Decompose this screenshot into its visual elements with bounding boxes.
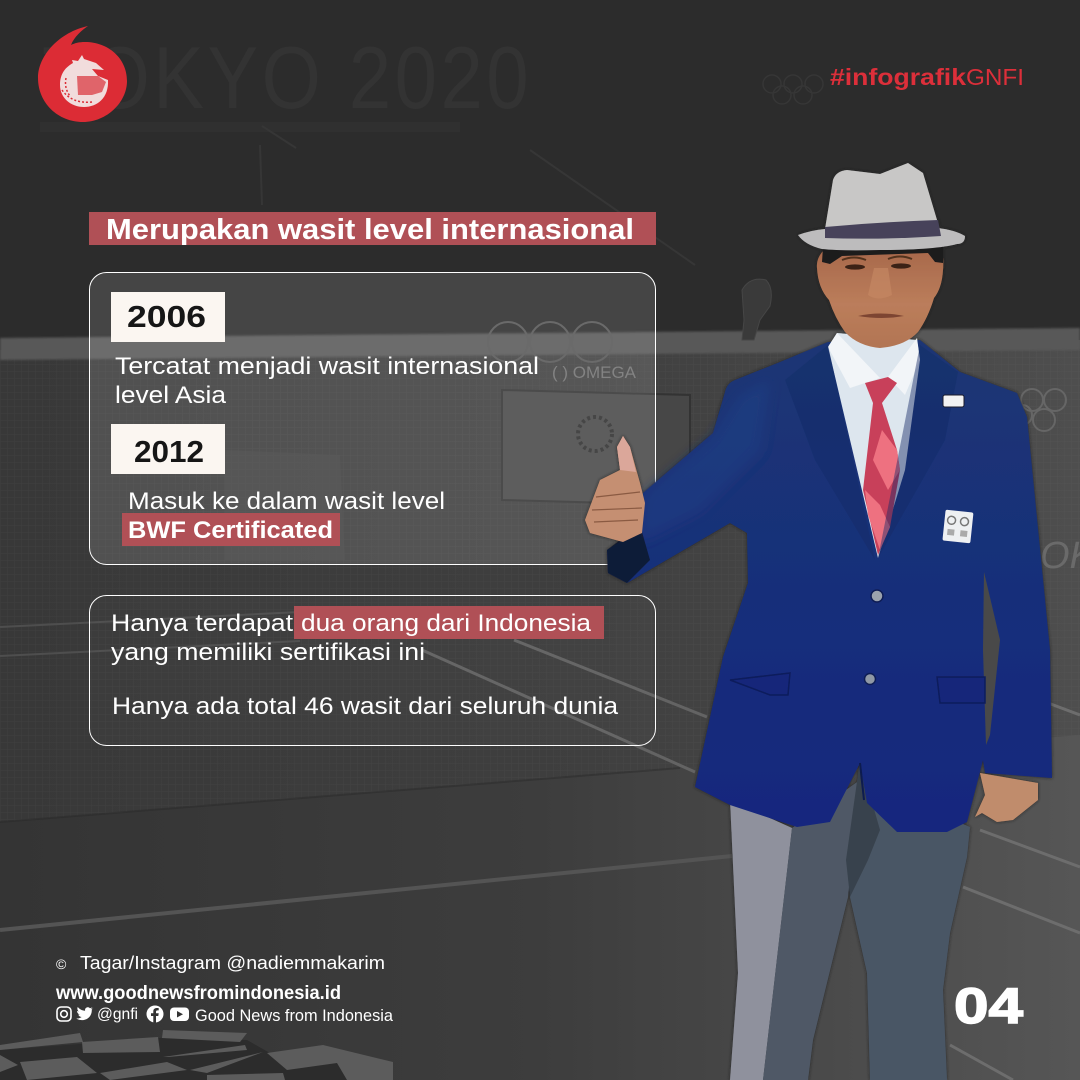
ghost rings top right — [763, 75, 823, 104]
sign board behind net — [502, 390, 690, 505]
court floor — [0, 735, 1080, 1080]
nose — [868, 268, 892, 298]
court line left lower — [0, 641, 300, 656]
lapel left — [785, 345, 875, 560]
panel: career timeline — [90, 272, 656, 564]
text 2012 — [122, 488, 445, 546]
Olympic rings right — [1012, 389, 1066, 431]
lapel pin — [943, 395, 964, 407]
fact one: Hanya terdapat — [111, 610, 293, 637]
gnfi handle: @gnfi — [97, 1006, 138, 1023]
social media row — [57, 1006, 394, 1025]
hashtag #infografikGNFI — [830, 64, 1024, 90]
board left — [225, 450, 345, 560]
left hand at side — [975, 773, 1038, 822]
vent line — [860, 763, 864, 800]
head — [817, 245, 943, 348]
blazer — [607, 333, 1052, 832]
court line diagonal inner — [514, 640, 707, 717]
year 2006: 2006 — [127, 299, 206, 334]
hashtag #infografikGNFI: GNFI — [966, 64, 1024, 90]
fact one: dua orang dari Indonesia — [301, 610, 592, 637]
checkered floor mark — [0, 1030, 393, 1080]
text 2012: BWF Certificated — [128, 517, 333, 544]
illustration: referee in blue blazer and white hat — [585, 163, 1052, 1080]
ghost stand lines — [260, 126, 695, 265]
white hat — [798, 163, 965, 250]
net lower edge — [0, 768, 680, 822]
Tokyo emblem — [578, 417, 612, 451]
pocket flap left — [730, 673, 790, 695]
logo GNFI — [38, 26, 127, 122]
panel: rarity facts — [90, 596, 656, 746]
button top — [871, 590, 883, 602]
page number: 04 — [954, 978, 1023, 1034]
trousers — [730, 760, 970, 1080]
shadow near cuff — [607, 525, 650, 583]
sleeve shading — [640, 380, 770, 540]
net top band — [0, 328, 1080, 360]
ghost title Tokyo 2020: TOKYO 2020 — [42, 28, 532, 127]
shirt — [828, 333, 920, 558]
website url: www.goodnewsfromindonesia.id — [55, 983, 341, 1004]
icon: instagram — [57, 1007, 71, 1021]
text 2006: level Asia — [115, 382, 227, 409]
eyes — [845, 263, 911, 270]
text 2012: Masuk ke dalam wasit level — [128, 488, 445, 515]
year 2012 — [111, 424, 225, 474]
year 2006 — [111, 292, 225, 342]
fact one: yang memiliki sertifikasi ini — [111, 639, 425, 666]
umpire chair silhouette — [742, 279, 771, 340]
page name: Good News from Indonesia — [195, 1006, 394, 1025]
court line diagonal outer — [422, 650, 695, 772]
hair — [822, 245, 943, 264]
photo credit: Tagar/Instagram @nadiemmakarim — [80, 953, 385, 973]
fact two: Hanya ada total 46 wasit dari seluruh dunia — [112, 693, 619, 720]
OMEGA sign: ( ) OMEGA — [552, 363, 637, 382]
gap between arm and body — [983, 572, 1000, 745]
hashtag #infografikGNFI: #infografik — [830, 64, 966, 90]
olympic badge — [942, 510, 973, 543]
text 2006: Tercatat menjadi wasit internasional — [115, 353, 539, 380]
photo credit: © — [56, 956, 67, 972]
button bottom — [864, 674, 876, 684]
collar left — [828, 333, 880, 388]
collar right — [888, 338, 920, 395]
court line left upper — [0, 612, 300, 627]
mouth — [858, 314, 904, 318]
icon: youtube — [170, 1008, 189, 1021]
lower court area — [0, 340, 1080, 1080]
necktie — [863, 377, 900, 555]
right hand thumbs up — [585, 436, 645, 542]
brows — [842, 256, 912, 260]
ghost ticker band — [40, 122, 460, 132]
heading banner: Merupakan wasit level internasional — [106, 214, 634, 246]
icon: facebook — [146, 1006, 164, 1022]
year 2012: 2012 — [134, 434, 204, 469]
court lines right — [950, 700, 1080, 1080]
icon: twitter — [76, 1007, 94, 1020]
pocket flap right — [937, 677, 985, 703]
lapel right — [878, 345, 958, 558]
rings above net — [488, 322, 612, 362]
fact one — [111, 606, 604, 666]
court line long — [0, 856, 732, 930]
net mesh — [0, 348, 1080, 822]
text 2006 — [115, 353, 539, 409]
